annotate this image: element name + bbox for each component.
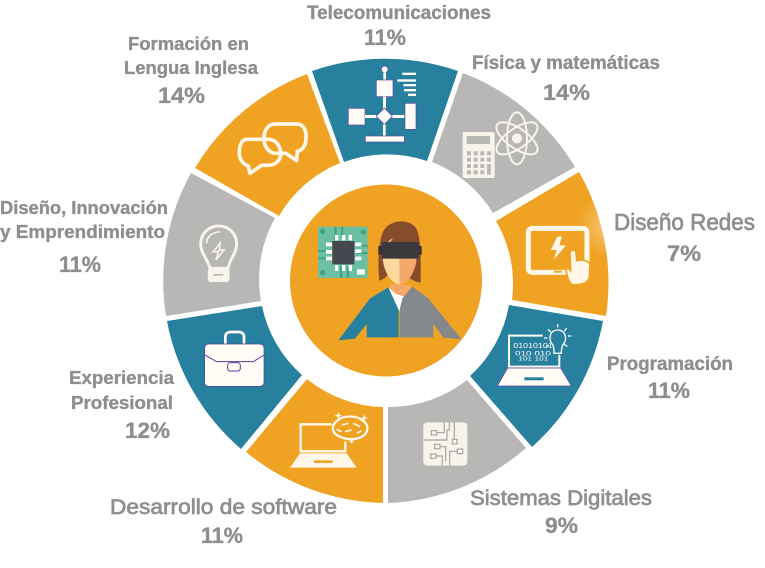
segment: Diseño Redes	[496, 172, 608, 316]
ring segments	[163, 59, 608, 503]
label: Física y matemáticas 14%	[472, 53, 660, 105]
label: Telecomunicaciones 11%: Telecomunicaciones	[307, 3, 491, 24]
label: Diseño, Innovación y Emprendimiento 11%: Diseño, Innovación	[0, 198, 168, 218]
segment: Física y matemáticas	[432, 73, 575, 213]
icon: flowchart	[348, 66, 416, 142]
icon: laptop with binary code and bulb: 01010101	[513, 341, 553, 350]
icon: microchip	[318, 227, 368, 278]
label: Telecomunicaciones 11%: 11%	[364, 25, 406, 50]
segment: Desarrollo de software	[246, 379, 383, 503]
icon: laptop with binary code and bulb: 101 101	[518, 357, 548, 363]
icon: laptop with brain	[290, 412, 368, 468]
icon: briefcase	[205, 332, 264, 386]
icon: digital circuit	[423, 422, 467, 466]
label: Experiencia Profesional 12%: Experiencia	[69, 368, 175, 388]
label: Física y matemáticas 14%: Física y matemáticas	[472, 53, 660, 74]
segment: Sistemas Digitales	[388, 380, 526, 503]
segment: Telecomunicaciones	[312, 59, 458, 162]
label: Física y matemáticas 14%: 14%	[543, 80, 590, 105]
icon: calculator and atom	[463, 112, 542, 178]
label: Formación en Lengua Inglesa 14%: Formación en	[128, 34, 249, 54]
label: Experiencia Profesional 12%: 12%	[125, 418, 170, 443]
segment: Experiencia Profesional	[167, 306, 302, 449]
label: Diseño Redes 7%	[614, 209, 755, 266]
label: Formación en Lengua Inglesa 14%: 14%	[158, 83, 205, 108]
label: Diseño Redes 7%: 7%	[667, 241, 701, 266]
label: Programación 11%: 11%	[648, 378, 690, 403]
label: Programación 11%: Programación	[607, 354, 733, 375]
segment: Diseño, Innovación y Emprendimiento	[163, 173, 275, 316]
label: Desarrollo de software 11%: Desarrollo de software	[110, 496, 337, 519]
center circle	[290, 184, 482, 376]
label: Formación en Lengua Inglesa 14%: Lengua Inglesa	[124, 58, 259, 78]
segment: Programación	[470, 305, 603, 447]
icon: laptop with binary code and bulb	[497, 324, 571, 386]
label: Sistemas Digitales 9%: Sistemas Digitales	[470, 487, 652, 510]
label: Diseño, Innovación y Emprendimiento 11%: y Emprendimiento	[0, 222, 165, 242]
label: Sistemas Digitales 9%	[470, 487, 652, 538]
label: Telecomunicaciones 11%	[307, 3, 491, 50]
segment: Formación en Lengua Inglesa	[195, 74, 340, 216]
label: Experiencia Profesional 12%	[69, 368, 175, 443]
label: Formación en Lengua Inglesa 14%	[124, 34, 259, 108]
label: Diseño, Innovación y Emprendimiento 11%: 11%	[59, 252, 101, 277]
label: Sistemas Digitales 9%: 9%	[545, 513, 578, 538]
label: Desarrollo de software 11%	[110, 496, 337, 548]
icon: tablet with touch	[528, 228, 590, 285]
icon: person with VR headset	[338, 221, 462, 340]
label: Diseño Redes 7%: Diseño Redes	[614, 209, 755, 235]
label: Programación 11%	[607, 354, 733, 403]
icon: light bulb	[201, 226, 237, 281]
icon: speech bubbles	[239, 124, 306, 173]
icon: laptop with binary code and bulb: 010 010	[515, 350, 551, 357]
label: Experiencia Profesional 12%: Profesional	[71, 393, 173, 413]
label: Diseño, Innovación y Emprendimiento 11%	[0, 198, 168, 277]
label: Desarrollo de software 11%: 11%	[201, 523, 243, 548]
